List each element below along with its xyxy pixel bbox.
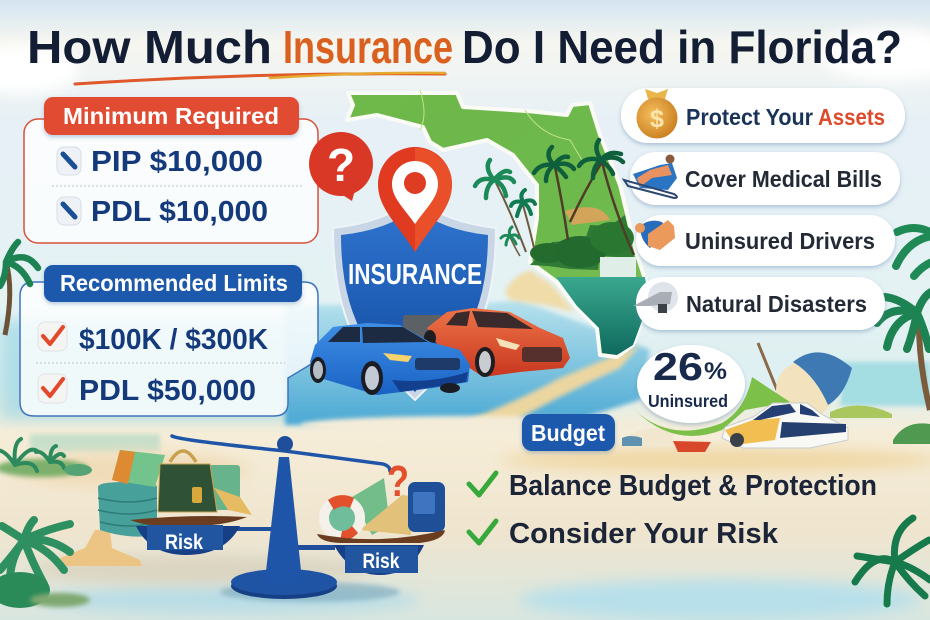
badge: recommended limits: Recommended Limits: [60, 270, 288, 296]
bottom left foliage: [0, 520, 90, 608]
uninsured badge: Uninsured: [648, 391, 728, 411]
icon: location pin: [378, 147, 452, 252]
list: natural disasters: [633, 277, 885, 330]
list: cover medical bills: [624, 152, 900, 205]
gray vehicle behind cars: [403, 315, 449, 339]
badge: minimum required: [44, 97, 299, 135]
row: PDL 50,000: PDL $50,000: [79, 375, 256, 407]
budget badge: Budget: [531, 420, 605, 446]
shield: insurance: [333, 198, 496, 400]
uninsured badge: [637, 345, 745, 423]
scale: [98, 436, 445, 602]
icon: money bag: [636, 89, 678, 138]
uninsured badge: 26: [653, 346, 703, 389]
icon: question bubble: ?: [327, 139, 355, 191]
right pan: [317, 457, 445, 575]
PDL row: PDL $10,000: [91, 196, 268, 228]
beach car: [722, 403, 848, 448]
blue car: [310, 323, 470, 395]
icon: question bubble: [309, 132, 373, 201]
map of Florida: [347, 90, 647, 357]
icon: money bag: $: [650, 105, 664, 133]
left pan: [98, 450, 252, 555]
title: [27, 21, 902, 84]
list: protect your assets: Assets: [818, 104, 885, 130]
panel: minimum required: [24, 97, 318, 243]
panel: recommended limits: [20, 265, 318, 416]
check: balance budget and protection: Balance Budget & Protection: [509, 470, 877, 502]
sand castle: [60, 530, 142, 566]
badge: minimum required: Minimum Required: [63, 103, 279, 129]
list: uninsured drivers: Uninsured Drivers: [685, 228, 875, 254]
PIP row: PIP $10,000: [91, 146, 263, 178]
badge: recommended limits: [44, 265, 302, 302]
list: cover medical bills: Cover Medical Bills: [685, 166, 882, 192]
bottom right foliage: [855, 518, 930, 604]
uninsured badge: %: [704, 358, 727, 385]
left palm tree: [0, 242, 38, 335]
beach scene with uninsured stat: [622, 343, 930, 452]
title: How Much: [27, 21, 272, 73]
left pan: Risk: [165, 531, 203, 554]
list: uninsured drivers: [635, 215, 895, 266]
title: Do I Need in Florida?: [462, 21, 902, 73]
far left foliage: [0, 439, 92, 477]
list: protect your assets: Protect Your: [686, 104, 813, 130]
right pan: ?: [387, 457, 409, 506]
right pan: Risk: [362, 550, 400, 573]
check: consider your risk: Consider Your Risk: [509, 518, 779, 550]
icon: medical stretcher: [624, 154, 677, 198]
row: 100K / 300K: $100K / $300K: [79, 324, 268, 356]
right palm trees: [877, 228, 930, 410]
shield: insurance: INSURANCE: [348, 259, 482, 291]
icon: handshake: [635, 220, 675, 250]
red car: [424, 308, 570, 377]
list: natural disasters: Natural Disasters: [686, 291, 867, 317]
budget badge: [522, 414, 615, 451]
far shore left: [30, 434, 160, 452]
list: protect your assets: [621, 88, 905, 143]
sea near cars: [285, 300, 650, 425]
title: Insurance: [283, 21, 453, 73]
icon: storm: [633, 282, 678, 313]
palm trees on map: [475, 140, 634, 256]
